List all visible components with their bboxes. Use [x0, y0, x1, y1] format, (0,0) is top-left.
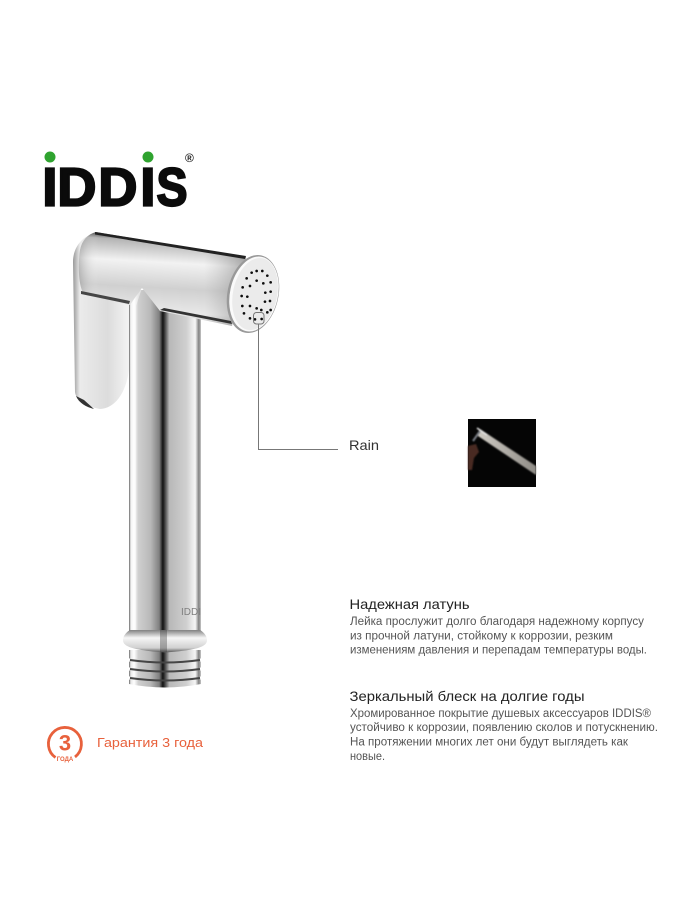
logo: IDDIS: ®: [185, 151, 194, 165]
engraved body mark: IDDIS: [181, 607, 208, 618]
logo: IDDIS: IDDI: [42, 158, 155, 218]
description: Хромированное покрытие душевых аксессуаров IDDIS®: [350, 708, 652, 720]
shower head barrel: [79, 232, 246, 326]
heading: Зеркальный блеск на долгие годы: [350, 688, 584, 704]
description: новые.: [350, 751, 385, 763]
callout line to nozzle: [254, 312, 338, 450]
collar: [123, 630, 207, 652]
product: chrome hand shower: [73, 232, 286, 688]
icon: 3 year ring: ГОДА: [57, 757, 74, 763]
lever: [73, 233, 131, 409]
warranty badge: [48, 727, 204, 763]
description: изменениям давления и перепадам температуры воды.: [350, 644, 647, 656]
label: Rain: Rain: [349, 437, 379, 453]
icon: 3 year ring: 3: [59, 730, 71, 756]
heading: Надежная латунь: [350, 596, 470, 612]
description: устойчиво к коррозии, появлению сколов и потускнению.: [350, 722, 658, 734]
description: [350, 616, 647, 656]
feature: brass: [350, 596, 647, 656]
logo: IDDIS: [42, 151, 194, 218]
nozzle face: [220, 250, 286, 338]
logo: IDDIS: S: [156, 156, 187, 217]
description: из прочной латуни, стойкому к коррозии, резким: [350, 630, 613, 642]
description: [350, 708, 658, 763]
warranty text: Гарантия 3 года: [97, 735, 204, 750]
thread: [129, 650, 201, 688]
thumbnail: spray photo: [468, 419, 536, 487]
description: На протяжении многих лет они будут выглядеть как: [350, 736, 629, 748]
description: Лейка прослужит долго благодаря надежному корпусу: [350, 616, 644, 628]
icon: 3 year ring: [48, 727, 81, 763]
feature: mirror shine: [350, 688, 658, 763]
pipe body: [129, 290, 201, 635]
